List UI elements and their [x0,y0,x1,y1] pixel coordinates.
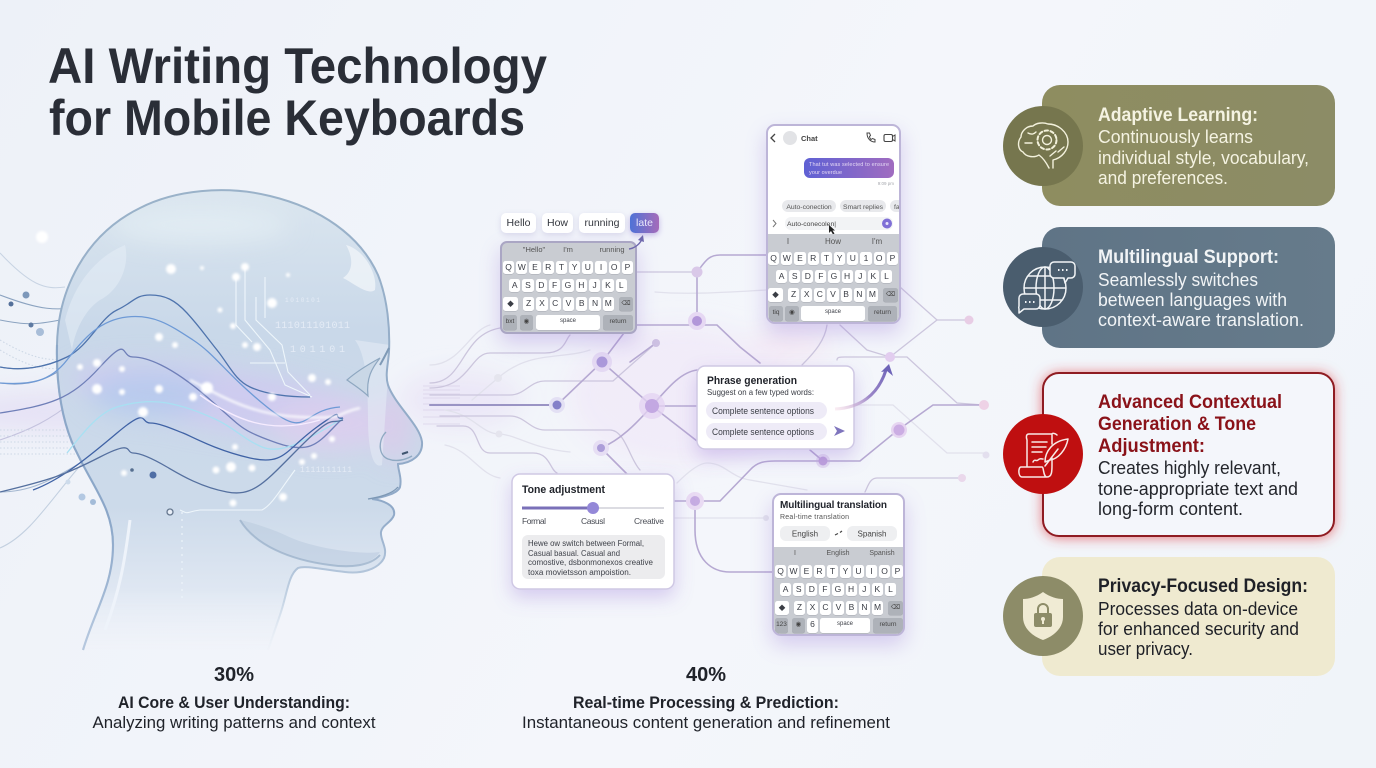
multilingual translation keyboard: C [822,602,829,612]
multilingual translation keyboard: X [810,602,815,612]
panel: privacy-focused design: user privacy. [1098,639,1193,659]
card: tone adjustment: Casual basual. Casual and [528,549,620,558]
panel: advanced contextual generation [1003,373,1334,536]
translation header: English [792,530,818,538]
chat header: Auto-conection [786,204,832,211]
keyboard panel: T [559,262,564,272]
keyboard panel: G [565,280,571,290]
strong network lines [430,255,983,572]
card: phrase generation: Suggest on a few typed words: [707,388,814,397]
panel: advanced contextual generation: Advanced Contextual [1098,392,1282,413]
chat keyboard mockup: ◆ [772,289,779,299]
keyboard panel [500,241,637,334]
multilingual translation keyboard: P [895,566,900,576]
multilingual translation keyboard: R [816,566,823,576]
card: phrase generation: Complete sentence options [712,427,814,437]
multilingual translation keyboard: T [830,566,835,576]
keyboard panel: K [605,280,611,290]
keyboard panel: W [518,262,526,272]
chat keyboard mockup: I'm [872,237,882,246]
multilingual translation keyboard: U [855,566,862,576]
keyboard panel: M [605,298,612,308]
word suggestion keyboard: running [584,217,620,229]
chat keyboard mockup: H [844,271,850,281]
multilingual translation keyboard: W [789,566,798,576]
ambient purple band [0,325,830,465]
keyboard panel: A [512,280,518,290]
multilingual translation keyboard: V [836,602,841,612]
chat keyboard mockup [766,124,901,324]
medium network lines [430,272,983,492]
tone slider [522,502,664,514]
icon: shield with lock [1023,592,1063,640]
chat keyboard mockup: Z [791,289,796,299]
panel: multilingual support: context-aware translation. [1098,310,1304,330]
chat keyboard mockup: I [787,237,789,246]
multilingual translation keyboard: L [888,584,893,594]
title [48,38,547,146]
icon: send arrow [834,426,845,436]
panel: adaptive learning: Adaptive Learning: [1098,105,1258,126]
binary data text [275,297,352,475]
card: tone adjustment: Casusl [581,516,605,526]
binary data text: 1 0 1 1 0 1 [290,345,345,356]
chat header: Smart replies [843,204,884,211]
word suggestion keyboard [491,212,662,352]
multilingual translation keyboard: H [848,584,854,594]
multilingual translation keyboard: O [881,566,888,576]
arrow: phrase output to node [835,364,893,409]
chat keyboard mockup: K [870,271,876,281]
keyboard panel: ◆ [507,298,514,308]
glowing particles [36,231,335,506]
stat: AI core 30% [92,664,376,732]
card: tone adjustment: toxa movietsson ampoistion. [528,568,631,577]
chat keyboard mockup: ⌫ [886,291,895,298]
keyboard panel: ◉ [524,318,529,325]
keyboard panel: J [592,280,597,290]
multilingual translation keyboard: ⌫ [891,604,900,611]
chat keyboard mockup: return [874,309,891,316]
chat keyboard mockup: V [830,289,836,299]
binary data text: 1111111111 [300,466,352,475]
multilingual translation keyboard: E [804,566,809,576]
multilingual translation keyboard: Y [843,566,848,576]
panel: multilingual support: Multilingual Support: [1098,247,1279,268]
chat keyboard mockup: E [797,253,803,263]
keyboard panel: O [611,262,618,272]
faint network lines [430,290,985,518]
card: phrase generation: Complete sentence options [712,406,814,416]
card: phrase generation [697,366,854,449]
panel: privacy-focused design [1003,557,1335,676]
card: tone adjustment: Formal [522,516,546,526]
network of circuit lines [430,255,990,572]
keyboard panel: Y [572,262,577,272]
word suggestion keyboard: late [636,217,653,229]
multilingual translation keyboard: English [827,550,849,557]
chat keyboard mockup: R [810,253,816,263]
keyboard panel: ⌫ [621,300,631,307]
panel: multilingual support [1003,227,1335,348]
multilingual translation keyboard: Spanish [869,550,895,557]
panel: multilingual support: Seamlessly switches [1098,270,1258,290]
panel: privacy-focused design: for enhanced security and [1098,619,1299,639]
keyboard panel: B [579,298,585,308]
background, head illustration and network [0,189,990,650]
card: tone adjustment: Hewe ow switch between Formal, [528,539,644,548]
multilingual translation keyboard: S [796,584,802,594]
stat: AI core 30%: Analyzing writing patterns and context [92,713,376,732]
icon: globe with chat bubbles [1019,262,1075,313]
word suggestion keyboard: How [547,217,568,229]
multilingual translation keyboard: Z [797,602,802,612]
keyboard panel: V [566,298,571,308]
multilingual translation keyboard: ◉ [796,621,801,628]
multilingual translation keyboard: A [783,584,788,594]
translation header: Multilingual translation [780,500,887,511]
multilingual translation keyboard: B [849,602,854,612]
icon: scroll and quill [1019,433,1068,477]
chat header: Auto-conecolen| [787,221,836,228]
title: AI Writing Technology [48,38,547,94]
panel: privacy-focused design: Processes data on-device [1098,599,1298,619]
panel: advanced contextual generation: Creates highly relevant, [1098,458,1281,478]
keyboard panel: Z [526,298,531,308]
multilingual translation keyboard [772,493,905,636]
stat: AI core 30%: 30% [214,664,254,686]
keyboard panel: X [539,298,545,308]
multilingual translation keyboard: Q [777,566,784,576]
panel: advanced contextual generation: long-form content. [1098,499,1243,519]
chat keyboard mockup: F [818,271,823,281]
keyboard panel: Q [505,262,512,272]
keyboard panel: N [592,298,598,308]
chat keyboard mockup: J [858,271,862,281]
small data nodes [8,292,173,515]
stat: real-time processing 40%: Instantaneous content generation and refinement [522,713,890,732]
panel: adaptive learning: and preferences. [1098,168,1228,188]
card: tone adjustment [512,474,674,589]
panel: multilingual support: between languages with [1098,290,1287,310]
keyboard panel: space [560,318,576,324]
multilingual translation keyboard: G [835,584,841,594]
keyboard panel: H [578,280,584,290]
keyboard panel: L [619,280,624,290]
stat: AI core 30%: AI Core & User Understanding: [118,694,350,712]
word chips [499,212,662,238]
chat keyboard mockup: P [890,253,895,263]
multilingual translation keyboard: I [870,566,873,576]
chat keyboard mockup: O [876,253,883,263]
head illustration [0,190,460,650]
panel: adaptive learning: individual style, vocabulary, [1098,148,1309,168]
multilingual translation keyboard: space [837,621,853,627]
multilingual translation keyboard: D [809,584,815,594]
card: tone adjustment: comostive, dsbonmonexos creative [528,558,653,567]
chat keyboard mockup: M [869,289,876,299]
binary data text: 111011101011 [275,321,350,332]
multilingual translation keyboard: ◆ [779,602,785,612]
arrow: keyboard to late chip [629,235,644,249]
multilingual translation keyboard: J [862,584,866,594]
multilingual translation keyboard: M [874,602,881,612]
card: tone adjustment: Creative [634,516,664,526]
network nodes [494,266,990,521]
chat keyboard mockup: U [850,253,856,263]
panel: advanced contextual generation: Adjustment: [1098,436,1205,457]
chat keyboard mockup: 1 [864,253,868,263]
multilingual translation keyboard: 123 [776,621,787,628]
chat keyboard mockup: C [817,289,823,299]
chat keyboard mockup: S [792,271,798,281]
stat: real-time processing 40%: Real-time Processing & Prediction: [573,694,839,712]
translation header: Spanish [858,530,886,538]
chat keyboard mockup: W [783,253,791,263]
title: for Mobile Keyboards [49,90,525,146]
multilingual translation keyboard: F [822,584,827,594]
translation header [780,500,897,541]
multilingual translation keyboard: N [861,602,868,612]
chat keyboard mockup: space [825,309,841,315]
chat keyboard mockup: X [804,289,810,299]
keyboard panel: U [585,262,591,272]
chat keyboard mockup: L [884,271,889,281]
keyboard panel: F [552,280,557,290]
chat keyboard mockup: D [805,271,811,281]
keyboard panel: D [538,280,544,290]
panel: adaptive learning [1003,85,1335,206]
keyboard panel: E [532,262,538,272]
beam exiting the face [423,386,460,424]
keyboard panel: R [545,262,551,272]
keyboard panel: I'm [563,245,573,254]
multilingual translation keyboard: I [794,550,796,557]
keyboard panel [772,547,905,637]
chat header: That tut was selected to ensure [809,162,889,168]
chat keyboard mockup: B [843,289,849,299]
binary data text: 1010101 [285,297,320,304]
keyboard panel: bxt [506,318,514,325]
incoming data lines, left of head [0,253,150,548]
panel: advanced contextual generation: tone-appropriate text and [1098,479,1298,499]
chat keyboard mockup: Y [837,253,842,263]
word suggestion keyboard: Hello [507,217,530,229]
chat header: fa [894,204,900,211]
keyboard panel: return [610,318,626,325]
keyboard panel: S [525,280,531,290]
chat keyboard mockup: How [825,237,841,246]
card: tone adjustment: Tone adjustment [522,484,605,496]
chat keyboard mockup: T [824,253,829,263]
keyboard panel: C [552,298,558,308]
multilingual translation keyboard: 6 [810,619,815,629]
keyboard panel: P [625,262,630,272]
stat: real-time processing 40%: 40% [686,664,726,686]
chat keyboard mockup: G [831,271,837,281]
multilingual translation keyboard: K [874,584,880,594]
translation header: Real-time translation [780,514,849,521]
panel: advanced contextual generation: Generation & Tone [1098,414,1256,435]
face details [105,348,412,630]
multilingual translation keyboard: return [880,621,896,628]
keyboard panel: I [600,262,602,272]
chat keyboard mockup: Q [770,253,777,263]
chat keyboard mockup: ◉ [789,309,795,316]
keyboard panel: running [599,245,625,254]
chat header: Chat [801,134,818,143]
chat keyboard mockup: A [779,271,784,281]
chat header: your overdue [809,170,842,176]
panel: adaptive learning: Continuously learns [1098,127,1253,147]
flowing waves [0,295,360,493]
panel: privacy-focused design: Privacy-Focused Design: [1098,576,1308,597]
card: phrase generation: Phrase generation [707,375,797,387]
icon: brain with gear [1019,123,1068,168]
chat keyboard mockup: N [856,289,862,299]
keyboard panel [766,234,901,324]
chat keyboard mockup: tiq [773,309,779,316]
keyboard panel: "Hello" [523,245,545,254]
chat header: 9:09 pm [878,181,894,186]
stat: real-time processing 40% [522,664,890,732]
chat header [770,131,900,234]
neural circuit traces [180,267,312,600]
